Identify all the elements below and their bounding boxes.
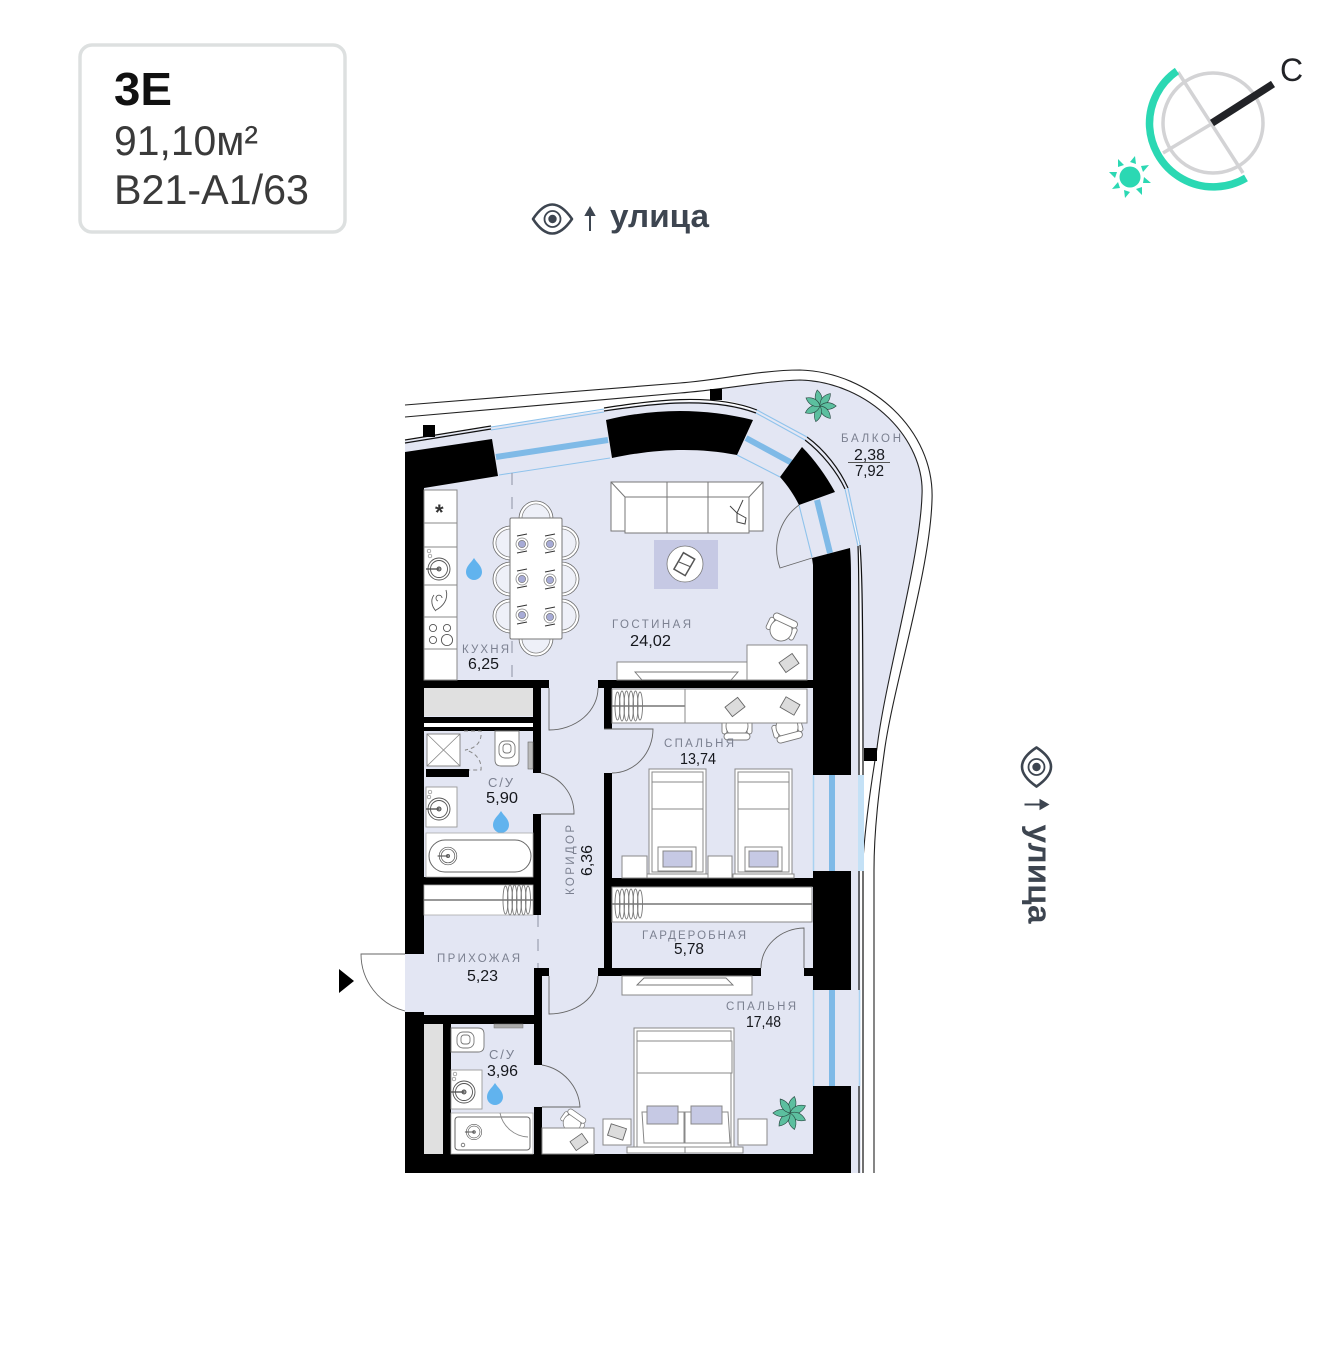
hob <box>429 624 453 646</box>
icon: lower bath water drop <box>487 1083 503 1105</box>
master bedroom label: 17,48 <box>746 1014 781 1031</box>
corridor label <box>565 825 596 895</box>
balcony <box>722 380 922 748</box>
washbasin upper bath <box>426 787 457 827</box>
master bedroom tv unit <box>622 976 752 995</box>
balcony railing posts <box>423 389 877 761</box>
balcony label <box>841 433 901 480</box>
rug and coffee table <box>654 540 718 589</box>
bedroom desk <box>685 689 807 723</box>
lower bathroom label: С/У <box>489 1047 515 1062</box>
apartment area: 91,10м² <box>114 117 258 164</box>
bedside table with laptop <box>603 1119 631 1145</box>
toilet upper bath <box>495 731 519 766</box>
dressing room label <box>642 930 746 958</box>
towel rail <box>528 742 533 769</box>
bathroom label <box>486 775 518 807</box>
dressing room label: 5,78 <box>674 941 704 958</box>
street label top <box>533 198 709 234</box>
master bedroom label <box>726 1001 796 1031</box>
nightstands <box>622 856 732 878</box>
kitchen label <box>462 644 509 673</box>
plant balcony <box>801 387 839 425</box>
bathtub lower <box>451 1113 533 1154</box>
balcony label: БАЛКОН <box>841 433 901 445</box>
bathroom label: 5,90 <box>486 790 518 807</box>
apartment type: 3E <box>114 63 172 115</box>
hallway label: 5,23 <box>467 968 498 985</box>
kitchen label: КУХНЯ <box>462 644 509 656</box>
single bed left <box>647 769 708 878</box>
master bedroom desk <box>542 1128 594 1154</box>
icon: kitchen water drop <box>466 558 482 580</box>
walls <box>405 411 851 1173</box>
shower <box>427 731 481 770</box>
icon: bath water drop <box>493 811 509 833</box>
bedroom label <box>664 738 734 768</box>
info card <box>80 45 345 232</box>
street label right: улица <box>1022 824 1058 924</box>
floor plan <box>361 370 932 1173</box>
balcony label: 2,38 <box>854 447 885 464</box>
dressing room label: ГАРДЕРОБНАЯ <box>642 930 746 942</box>
compass <box>1109 52 1303 198</box>
living room label: 24,02 <box>630 633 671 650</box>
living room label <box>612 619 691 650</box>
bedside table <box>738 1119 767 1145</box>
apartment floor <box>405 401 861 1173</box>
corridor label: 6,36 <box>579 845 596 876</box>
icon: entrance arrow <box>339 969 354 993</box>
double bed <box>627 1028 743 1153</box>
bedroom label: 13,74 <box>680 751 716 768</box>
lower bathroom label <box>487 1047 518 1080</box>
dining chairs <box>493 501 579 656</box>
room thresholds <box>512 473 538 968</box>
corridor label: КОРИДОР <box>565 825 577 895</box>
hallway label <box>437 953 520 985</box>
kitchen label: 6,25 <box>468 656 499 673</box>
apartment code: B21-A1/63 <box>114 166 309 213</box>
living room label: ГОСТИНАЯ <box>612 619 691 631</box>
bedroom wardrobe <box>612 689 685 723</box>
facade double lines <box>405 399 863 1173</box>
washbasin lower bath <box>451 1070 482 1109</box>
toilet lower bath <box>451 1028 484 1052</box>
technical shaft <box>424 688 533 1154</box>
living room tv unit <box>617 662 747 680</box>
plant bedroom <box>769 1092 811 1134</box>
street label right <box>1022 748 1058 924</box>
bedroom chairs <box>722 712 805 744</box>
towel rail lower <box>494 1024 523 1028</box>
dining table <box>510 518 562 639</box>
living room desk <box>747 645 807 680</box>
single bed right <box>733 769 794 878</box>
bathtub upper <box>426 833 533 877</box>
bedroom label: СПАЛЬНЯ <box>664 738 734 750</box>
compass north label: C <box>1280 52 1303 88</box>
dressing room shelf <box>612 887 812 922</box>
master bedroom label: СПАЛЬНЯ <box>726 1001 796 1013</box>
hallway label: ПРИХОЖАЯ <box>437 953 520 965</box>
lower bathroom label: 3,96 <box>487 1063 518 1080</box>
doors <box>361 505 812 1107</box>
bathroom label: С/У <box>488 775 514 790</box>
master bedroom desk chair <box>557 1107 588 1137</box>
street label top: улица <box>610 198 709 234</box>
kitchen sink <box>426 558 450 580</box>
icon: sun <box>1109 156 1151 198</box>
sofa <box>611 482 763 533</box>
white gap <box>424 723 533 727</box>
dishwasher mark <box>432 590 447 611</box>
balcony outlines <box>405 370 932 1173</box>
kitchen units <box>424 490 457 680</box>
windows <box>491 409 861 1086</box>
living room office chair <box>763 611 801 646</box>
balcony label: 7,92 <box>855 463 884 480</box>
fridge mark: * <box>435 500 444 525</box>
corridor wardrobe <box>424 885 533 915</box>
